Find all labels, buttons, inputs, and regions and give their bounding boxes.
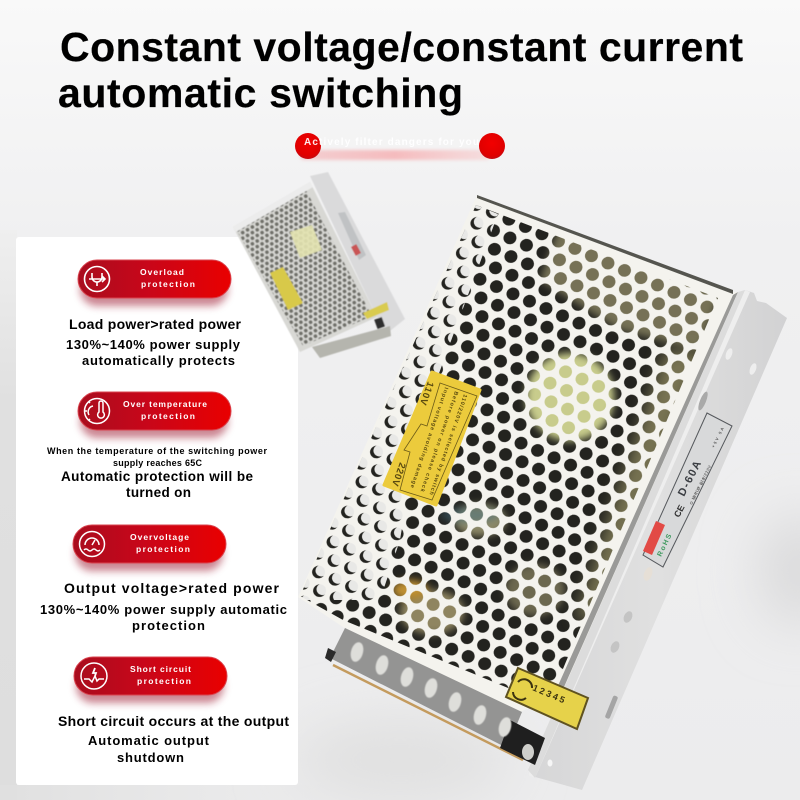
yellow terminal label <box>506 668 588 729</box>
text: overload description: automatically protects <box>82 353 235 368</box>
subtitle ribbon <box>295 133 505 160</box>
rating label on flange: CE <box>672 503 687 519</box>
terminal block <box>325 628 545 765</box>
text: overvoltage description: 130%~140% power supply automatic <box>40 602 287 617</box>
text: overload description: 130%~140% power supply <box>66 337 241 352</box>
yellow voltage sticker: Input voltage avoiding damage <box>409 386 449 489</box>
button: overvoltage protection <box>73 525 226 571</box>
button: overload protection: protection <box>141 279 195 289</box>
perforation holes <box>301 205 718 688</box>
rating label on flange <box>643 413 732 567</box>
text: over temperature description: Automatic protection will be <box>61 469 253 484</box>
button: short circuit protection: protection <box>137 676 191 686</box>
icon: gauge <box>80 532 104 556</box>
text: over temperature description: When the temperature of the switching power <box>47 446 267 456</box>
button: overload protection: Overload <box>140 267 184 277</box>
rating label on flange: +5V 5A <box>710 426 725 448</box>
text: short circuit description: shutdown <box>117 750 184 765</box>
button: overvoltage protection: protection <box>136 544 190 554</box>
button: overvoltage protection: Overvoltage <box>130 532 189 542</box>
button: short circuit protection: Short circuit <box>130 664 191 674</box>
button: overload protection <box>78 260 231 306</box>
rating label on flange: OUTPUT <box>688 476 707 505</box>
text: over temperature description <box>47 446 267 500</box>
button: over temperature protection: Over temperature <box>123 399 207 409</box>
rating label on flange: RoHS <box>657 533 673 558</box>
text: overvoltage description: protection <box>132 618 205 633</box>
icon: thermometer and sun <box>84 398 110 424</box>
yellow voltage sticker: Before power on please check <box>419 390 459 493</box>
text: over temperature description: supply reaches 65C <box>113 458 202 468</box>
text: overvoltage description <box>40 580 287 633</box>
yellow voltage sticker: 110/220V is selected by switch <box>428 393 468 496</box>
text: short circuit description: Automatic output <box>88 733 210 748</box>
title <box>58 24 743 116</box>
button: over temperature protection <box>78 392 231 438</box>
text: overvoltage description: Output voltage>rated power <box>64 580 280 596</box>
yellow voltage sticker: 110V <box>417 380 436 407</box>
yellow voltage sticker: 220V <box>389 461 408 488</box>
side flange <box>528 290 787 790</box>
subtitle ribbon: Actively filter dangers for you <box>304 137 479 148</box>
title: automatic switching <box>58 70 463 116</box>
text: short circuit description <box>58 713 289 765</box>
icon: short circuit pulse <box>81 663 107 689</box>
text: over temperature description: turned on <box>126 485 191 500</box>
rating label on flange: INPUT 110/220V <box>690 464 712 500</box>
text: overload description <box>66 316 242 368</box>
text: overload description: Load power>rated power <box>69 316 242 332</box>
title: Constant voltage/constant current <box>60 24 743 70</box>
rating label on flange: D-60A <box>676 459 704 498</box>
panel: protection list <box>16 237 298 785</box>
text: short circuit description: Short circuit occurs at the output <box>58 713 289 729</box>
button: short circuit protection <box>74 657 227 703</box>
perforated top plate <box>290 190 750 778</box>
yellow voltage sticker <box>384 372 480 505</box>
button: over temperature protection: protection <box>141 411 195 421</box>
icon: plug in circle <box>84 266 110 292</box>
small product photo: power supply <box>233 172 405 358</box>
yellow terminal label: 12345 <box>531 683 566 705</box>
main product photo: power supply <box>290 190 787 790</box>
